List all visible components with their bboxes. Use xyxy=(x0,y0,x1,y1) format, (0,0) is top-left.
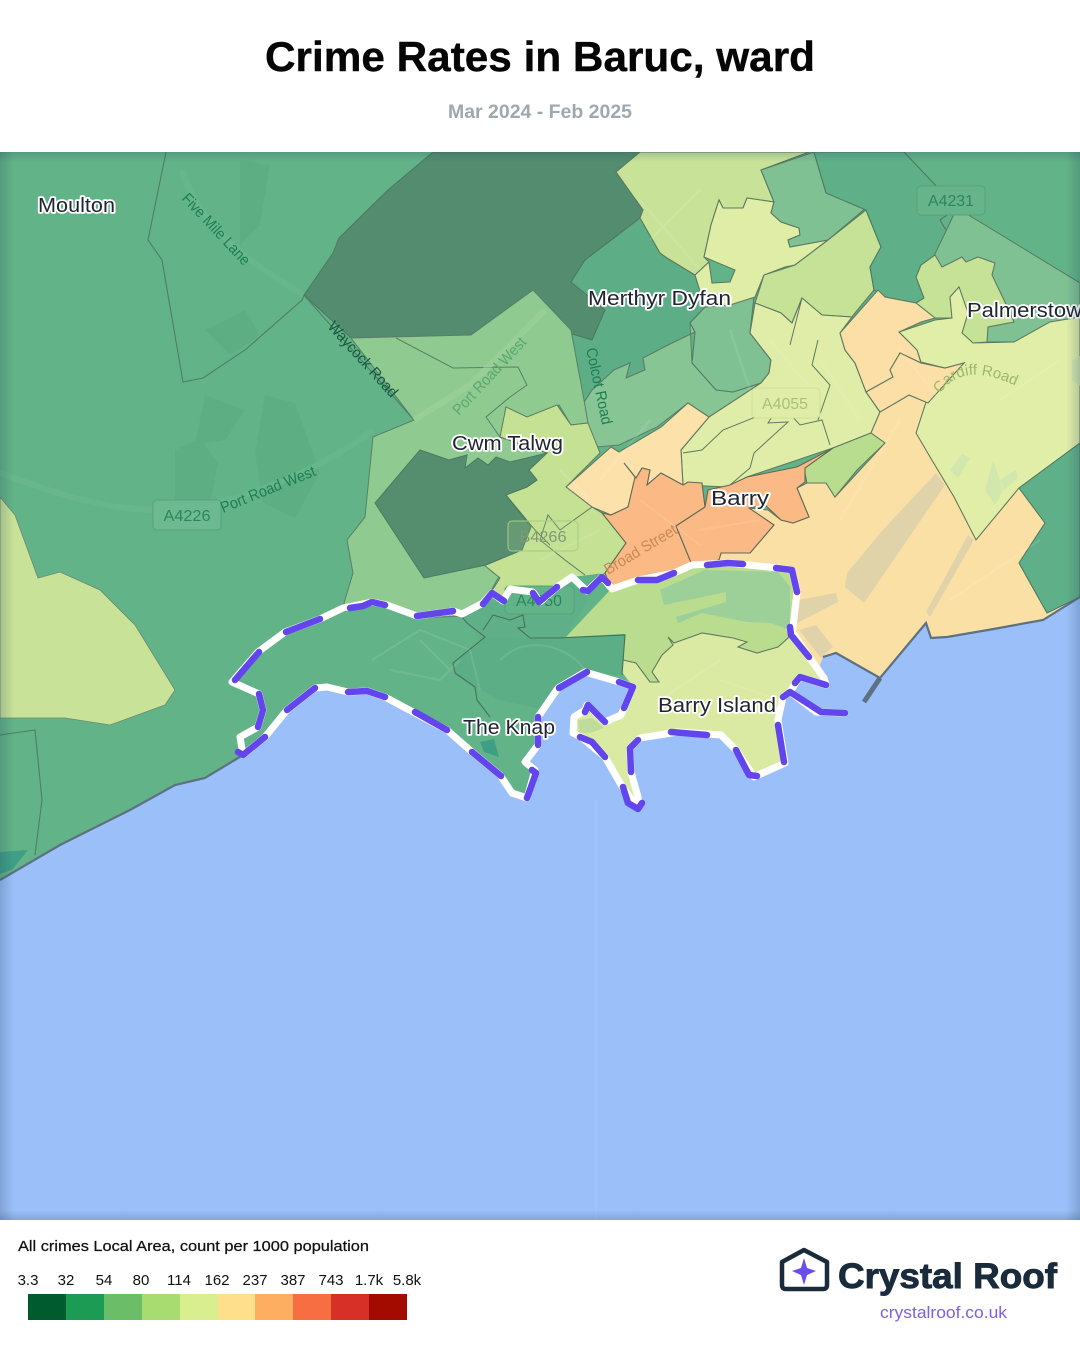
legend values: 54 xyxy=(96,1272,112,1289)
small green patch on headland xyxy=(578,718,604,733)
teal patch xyxy=(480,739,499,757)
region: Colcot mid green xyxy=(581,323,761,447)
region: south-west lime xyxy=(0,497,175,725)
road label: Port Road West (north): Port Road West xyxy=(449,334,531,419)
region: lime north-east xyxy=(755,210,881,323)
shield: A4055: A4055 xyxy=(762,396,808,413)
region: peach north xyxy=(840,290,935,392)
icon: house with star xyxy=(782,1250,827,1289)
region: peach west-centre xyxy=(566,403,709,515)
region: pale lime north xyxy=(695,198,828,307)
woodland patches xyxy=(30,160,1080,680)
legend values: 1.7k xyxy=(355,1272,384,1289)
place: Palmerstow: Palmerstow xyxy=(967,300,1080,322)
subtitle: date range: Mar 2024 - Feb 2025 xyxy=(448,102,632,123)
road label: Colcot Road: Colcot Road xyxy=(582,346,615,426)
region: south-east green xyxy=(1019,443,1080,613)
region: light green Cwm Talwg xyxy=(342,290,588,618)
streets texture xyxy=(372,190,1060,700)
shield: A4050 xyxy=(505,586,574,614)
shield: A4231: A4231 xyxy=(928,193,974,210)
place: Barry: Barry xyxy=(711,488,769,510)
road label: Waycock Road: Waycock Road xyxy=(324,318,401,401)
legend values: 32 xyxy=(58,1272,74,1289)
map base: low-crime green xyxy=(0,152,1080,879)
region: A4050 green south of boundary xyxy=(576,573,604,586)
shield: A4231 xyxy=(917,186,985,215)
region: mid green centre xyxy=(690,297,771,392)
town centre internal outlines xyxy=(683,298,830,485)
legend values: 114 xyxy=(167,1272,191,1289)
map edge vignette xyxy=(0,152,1080,1220)
road names xyxy=(182,192,1019,574)
breakwater xyxy=(864,678,880,702)
water ponds xyxy=(950,356,1080,505)
tile seam xyxy=(595,800,597,1220)
title: Crime Rates in Baruc, ward xyxy=(265,33,815,80)
place: Barry Island: Barry Island xyxy=(658,695,776,717)
ward outlines in green area xyxy=(0,152,414,855)
region: lime inner boundary xyxy=(506,495,592,575)
place: The Knap: The Knap xyxy=(463,717,555,739)
place: Merthyr Dyfan: Merthyr Dyfan xyxy=(588,288,731,310)
place: Cwm Talwg: Cwm Talwg xyxy=(452,433,563,455)
logo: Crystal Roof xyxy=(782,1250,1057,1322)
legend values: 387 xyxy=(280,1272,306,1289)
legend values: 80 xyxy=(133,1272,149,1289)
road label: Port Road West (A4226): Port Road West xyxy=(218,463,319,517)
legend xyxy=(18,1238,422,1320)
shield: B4266: B4266 xyxy=(520,529,567,546)
region: dark Cwm area xyxy=(375,450,547,578)
legend values: 162 xyxy=(204,1272,230,1289)
coastline xyxy=(0,597,1080,880)
sea xyxy=(0,597,1080,1220)
region: Port Road West band xyxy=(414,310,545,420)
region: lime Palmerston xyxy=(916,255,1014,343)
ward boundary: purple dashes xyxy=(235,563,845,809)
Barry Island north boundary xyxy=(623,630,791,682)
region: orange centre xyxy=(676,448,833,565)
region: Barry Island north lime xyxy=(566,566,794,682)
teal corner patch xyxy=(0,850,28,874)
legend values xyxy=(18,1272,422,1289)
region: east mid green xyxy=(916,208,1080,342)
region: road bands xyxy=(302,295,304,298)
region: Merthyr Dyfan green xyxy=(569,218,705,407)
region: pale lime town centre xyxy=(681,298,880,487)
region: western boundary outline xyxy=(396,338,527,437)
legend values: 3.3 xyxy=(18,1272,38,1289)
legend values: 237 xyxy=(242,1272,268,1289)
region: lime Cwm Talwg south xyxy=(483,405,626,605)
legend values: 5.8k xyxy=(393,1272,422,1289)
road label: Cardiff Road: Cardiff Road xyxy=(934,364,1019,392)
legend title: All crimes Local Area, count per 1000 population xyxy=(18,1238,369,1255)
region: dark north area xyxy=(304,152,643,340)
Knap boundary line xyxy=(453,615,625,717)
panel: choropleth map xyxy=(0,152,1080,1220)
region: Cardiff Road pale lime xyxy=(899,287,1080,540)
shield: A4226: A4226 xyxy=(164,508,211,525)
region: lime green patch xyxy=(804,433,885,497)
logo wordmark: Crystal Roof xyxy=(838,1257,1057,1296)
ward boundary: white base xyxy=(232,563,845,808)
region: peach north 2 xyxy=(866,353,964,412)
docks grey xyxy=(797,473,974,658)
region: big peach east xyxy=(720,396,1068,680)
road shields xyxy=(153,186,985,614)
shield: B4266 xyxy=(508,521,578,551)
road label: Broad Street: Broad Street xyxy=(601,521,681,578)
region: lime north xyxy=(616,152,809,275)
road label: Five Mile Lane: Five Mile Lane xyxy=(178,190,253,269)
shield: A4226 xyxy=(153,500,221,530)
region: darker green north-east xyxy=(814,152,957,303)
shield: A4050: A4050 xyxy=(516,593,562,610)
legend values: 743 xyxy=(318,1272,344,1289)
region: Knap green north xyxy=(453,635,625,710)
region: mid green north-east xyxy=(761,152,866,247)
region: orange west xyxy=(602,463,705,588)
place labels xyxy=(38,195,1080,739)
logo url: crystalroof.co.uk xyxy=(880,1304,1008,1322)
place: Moulton: Moulton xyxy=(38,195,115,217)
legend colour scale xyxy=(28,1294,407,1320)
shield: A4055 xyxy=(752,388,820,418)
region: Barry golf green patch xyxy=(660,570,790,630)
region: Barry Island pale lime xyxy=(573,630,824,808)
